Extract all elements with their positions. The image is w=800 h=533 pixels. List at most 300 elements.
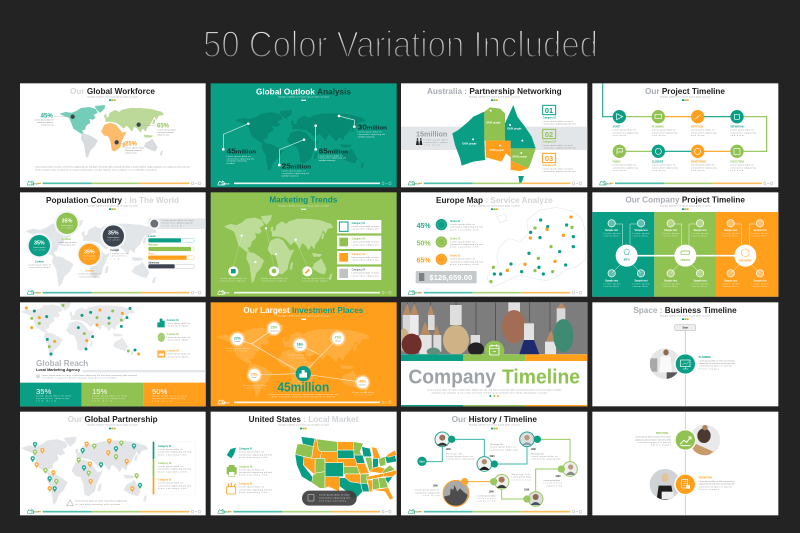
timeline labels row one: Lorem ipsum dolor sit [652, 129, 676, 132]
australia map [452, 105, 536, 183]
stat 25 million: consectetur adipiscing elit [282, 172, 309, 175]
connector lines [237, 328, 363, 382]
footer [27, 509, 200, 514]
sample text labels top: Sample text [605, 229, 618, 232]
bubble dark: sed [110, 258, 120, 260]
sample text labels top: Sample text [664, 279, 677, 282]
bubble green: 35% [62, 219, 73, 225]
percentage bands [20, 383, 206, 406]
timeline notes: 1990 [433, 486, 439, 488]
percentage bands: consectetur adipiscing [36, 397, 69, 400]
location bubbles: France [297, 347, 303, 349]
stat 45% [34, 114, 54, 127]
slide: australia partnership networking: XXXK people [507, 128, 522, 130]
sample text labels top: Sample text [634, 229, 648, 232]
category panel: consectetur adipiscing elit sed [158, 484, 191, 487]
location bubbles: 27m [335, 336, 341, 340]
start pill: Start [682, 327, 688, 330]
stat 30 million: sed diam nonummy [358, 136, 375, 138]
timeline labels row two: Lorem ipsum dolor sit [691, 164, 715, 167]
category 03: Lorem ipsum dolor sit amet [543, 167, 573, 170]
lorem labels: consectetur [723, 235, 738, 238]
category panel: diam nonummy nibh [158, 454, 187, 456]
bubble teal [27, 233, 52, 269]
content 03: Lorem ipsum dolor sit [167, 353, 190, 356]
category 02: diam nonummy nibh [239, 475, 268, 477]
percentage bands: 50% [152, 387, 168, 396]
globe callout [148, 218, 206, 229]
category 02: Lorem ipsum dolor sit [239, 468, 264, 471]
timeline labels row two: FINISH [613, 162, 621, 164]
sample text labels top: Sample text [664, 229, 677, 232]
content 03: consectetur adipis [167, 355, 188, 358]
stat 25 million: Lorem ipsum dolor sit [282, 170, 306, 173]
slide: population country: Sample subtitle text lorem ipsum dolor sit amet [87, 204, 138, 207]
percentage bands: Lorem ipsum dolor sit amet [92, 395, 127, 398]
category 01 [543, 105, 576, 126]
world map [216, 325, 370, 397]
slide title: Marketing Trends [269, 195, 338, 205]
note with warning icon [67, 500, 127, 506]
category 03: Category 03 [543, 164, 557, 167]
world map [235, 110, 366, 171]
stat 45 million: tincidunt [227, 162, 235, 165]
bubble orange: Content [85, 270, 94, 273]
reach note [36, 374, 137, 380]
location bubbles: 45m [359, 380, 366, 384]
category card 04: Lorem ipsum dolor sit amet [352, 272, 379, 275]
sample text labels top: Sample text [693, 279, 707, 282]
series 01: 45% [417, 223, 431, 230]
big heading: Company [408, 366, 496, 388]
slide title: Australia : Partnership Networking [427, 86, 562, 96]
cover description: Lorem ipsum dolor sit amet, consectetur adipiscing elit, sed diam nonummy nibh euismod tincidunt ut laoreet dolore magna [427, 389, 562, 392]
timeline labels row one: DEFINITION [730, 127, 744, 129]
bubble green: sit amet [61, 227, 73, 230]
world map [25, 220, 157, 287]
content 01: consectetur adipis [167, 325, 188, 328]
slide: australia partnership networking: XXXK people [462, 143, 477, 145]
definition node [674, 473, 696, 495]
bottom icons: Lorem ipsum dolor sit [261, 277, 288, 280]
timeline labels row two: EXECUTION [730, 162, 744, 164]
series 03: Series 03 [450, 256, 461, 258]
bubble teal: consectetur adipis [29, 266, 50, 269]
slide title: Our Global Workforce [70, 86, 155, 96]
timeline labels row one [613, 126, 756, 137]
slide: history timeline: Sample subtitle text lorem ipsum dolor sit amet [469, 423, 520, 426]
timeline nodes [613, 110, 744, 158]
category 02: consectetur adipiscing elit sed [543, 147, 576, 150]
category panel: consectetur adipiscing elit sed [158, 468, 191, 471]
stat 65%: Lorem ipsum dolor [157, 128, 176, 131]
stat 65% [157, 124, 176, 137]
slide: australia partnership networking: Sample subtitle text lorem ipsum dolor sit amet [469, 95, 520, 98]
europe outline map [487, 207, 587, 287]
lorem labels: Lorem ipsum [723, 282, 740, 285]
planning text: adipiscing elit sed diam nonummy nibh [699, 362, 735, 365]
timeline notes: Message title [512, 473, 531, 476]
content 02: Content 02 [167, 333, 179, 336]
photo of hanging bulbs [399, 302, 587, 356]
stat 30 million [358, 125, 387, 138]
cover description [427, 389, 562, 395]
total value: $126,659.00 [429, 273, 472, 282]
stat 65%: 65% [157, 124, 170, 130]
footer: Space [222, 181, 230, 185]
definition text: dolore magna [699, 488, 719, 491]
definition text: Lorem ipsum dolor sit amet consectetur [699, 480, 735, 483]
sample text labels top [605, 229, 767, 282]
timeline notes: 1990 [555, 476, 561, 478]
timeline labels row two: MONITORING [691, 162, 706, 164]
series 03 [417, 254, 483, 266]
timeline labels row one: sed diam [652, 135, 666, 137]
bottom icons: consectetur adipis [261, 280, 286, 283]
slide: business timeline top: Sample subtitle text lorem ipsum dolor sit amet [660, 314, 711, 317]
green pins [33, 440, 139, 485]
content 01: Content 01 [167, 319, 179, 322]
main nodes: CREATE [680, 259, 691, 262]
slide: global partnership: Sample subtitle text lorem ipsum dolor sit amet [87, 423, 138, 426]
timeline notes: Lorem ipsum dolor [512, 476, 531, 479]
series 01: diam nonummy nibh [450, 229, 479, 231]
city photo node [443, 478, 469, 506]
bottom icons: Lorem ipsum dolor sit [303, 277, 330, 280]
category 03: consectetur adipiscing elit sed [543, 170, 576, 173]
lorem labels: consectetur [604, 285, 619, 288]
category card 02: Category 02 [352, 238, 366, 241]
bubble teal: Lorem ipsum dolor sit [28, 263, 51, 266]
note with warning icon: Lorem ipsum dolor sit amet consectetur adipiscing [75, 500, 127, 503]
timeline labels row one: START [613, 126, 621, 129]
stat 15 million: Lorem ipsum dolor [424, 139, 448, 142]
main heading: 50 Color Variation Included [203, 24, 598, 65]
category card 02: Lorem ipsum dolor sit amet [352, 241, 379, 244]
footer: Space [222, 510, 230, 514]
category panel [153, 442, 196, 494]
footer [218, 181, 391, 185]
timeline notes: Lorem ipsum dolor sit [446, 455, 473, 458]
sample text labels top: Sample text [753, 229, 767, 232]
initiation text: euismod tincidunt ut laoreet [638, 441, 671, 444]
category 02: Lorem ipsum dolor sit amet [543, 144, 573, 147]
timeline notes: Message title [490, 443, 504, 446]
bubble orange: sit amet [83, 257, 96, 260]
planning text: Lorem ipsum dolor sit amet consectetur [699, 359, 735, 362]
timeline labels row two: Lorem ipsum dolor sit [652, 164, 676, 167]
category 02: consectetur adipiscing elit sed [239, 471, 272, 474]
bubble notes: Lorem ipsum dolor [225, 347, 249, 350]
sample text labels top: Sample text [753, 279, 767, 282]
sample text labels top: Sample text [724, 279, 737, 282]
location bubbles: Russia [335, 340, 341, 342]
lorem labels: consectetur [752, 235, 767, 238]
slide title: Europe Map : Service Analyze [436, 195, 553, 205]
connector lines [627, 253, 745, 258]
stat 45%: sed amet consecte [37, 121, 54, 124]
slide: global outlook analysis [211, 83, 397, 187]
planning text: dolore magna [699, 367, 719, 370]
series 02: diam nonummy nibh [450, 247, 479, 249]
percentage bands: Lorem ipsum dolor sit amet [36, 395, 71, 398]
definition text: euismod tincidunt ut laoreet [699, 485, 732, 488]
percentage bands: consectetur adipiscing [92, 397, 125, 400]
center investment icon [296, 366, 311, 381]
category panel: diam nonummy nibh [158, 471, 187, 473]
timeline labels row two: sed diam [652, 170, 666, 172]
stat 45%: 45% [41, 114, 53, 120]
percentage bands: Lorem ipsum dolor sit amet [152, 395, 187, 398]
footer [408, 509, 581, 514]
timeline notes: consectetur adipiscing [531, 458, 560, 461]
category card 04: consectetur adipiscing [352, 274, 379, 277]
main nodes [616, 245, 756, 267]
initiation text: adipiscing elit sed diam nonummy nibh [635, 438, 672, 441]
dark callout pill: sed diam nonummy [319, 500, 347, 502]
initiation text: dolore magna [651, 444, 672, 447]
dark callout pill: consectetur adipiscing elit [319, 496, 350, 499]
slide: history timeline [401, 412, 587, 515]
slide: united states local market [211, 412, 397, 515]
timeline labels row two: consectetur adipiscing [691, 166, 717, 169]
lorem labels: Lorem ipsum [633, 232, 650, 235]
timeline notes [415, 443, 563, 503]
photo: rafting [690, 425, 720, 455]
timeline notes: consectetur adipiscing [415, 491, 440, 494]
portrait nodes teal [435, 432, 541, 471]
slide: australia partnership networking: XXXK people [486, 122, 501, 124]
stat 45%: adipiscing [41, 125, 54, 127]
category 01: Category 01 [239, 448, 253, 451]
bottom icons [220, 266, 330, 283]
bubble dark: 35% [108, 231, 119, 237]
slide title: Our Largest Investment Places [243, 305, 364, 315]
location bubbles: 25m [251, 372, 258, 376]
slide: australia partnership networking [401, 83, 587, 187]
lorem labels [604, 232, 769, 288]
footer: Space [31, 181, 39, 185]
initiation text: INITIATION [656, 432, 668, 435]
slide: our project timeline [592, 83, 778, 187]
progress bars: Boss [148, 253, 155, 255]
location bubbles: 18m [297, 342, 303, 346]
category card 01 [337, 220, 381, 233]
bubble green: Lorem ipsum dolor [58, 241, 77, 244]
content 01 [157, 319, 190, 328]
category 01: diam nonummy nibh [239, 457, 268, 459]
slide: largest investment places [211, 302, 397, 406]
series 02: 50% [417, 240, 431, 247]
series 03: consectetur adipiscing elit sed [450, 260, 483, 263]
total figure [268, 381, 339, 398]
total figure: 45million [277, 381, 329, 395]
category card 03: Lorem ipsum dolor sit amet [352, 256, 379, 259]
bottom icons: Lorem ipsum dolor sit [220, 277, 247, 280]
stat 25 million [282, 164, 311, 177]
bubble teal: Lorem ipsum [33, 246, 46, 249]
vertical timeline [684, 331, 687, 406]
timeline notes: consectetur adipiscing [446, 458, 475, 461]
timeline labels row one: INITIATION [691, 126, 703, 129]
location bubbles: Canada [234, 341, 240, 343]
footer: Space [31, 291, 39, 295]
stat 25%: adipiscing [125, 153, 137, 155]
content 02 [158, 333, 190, 342]
timeline notes: 1990 [531, 449, 537, 451]
stat 65 million: sed diam nonummy [319, 160, 336, 162]
bubble green: Content [62, 238, 71, 241]
description: minim veniam, quis nostrud exerci tation ullamcorper suscipit lobortis nisl ut aliquip ex ea commodo consequat [35, 169, 157, 172]
map callout lines [223, 116, 354, 165]
location bubbles: Brazil [252, 377, 257, 379]
timeline notes: consectetur [512, 478, 531, 481]
total value [416, 271, 477, 283]
start pill [675, 325, 696, 331]
category 03 [543, 153, 576, 173]
bubble green [54, 211, 80, 247]
series 01 [417, 219, 483, 231]
stat 15 million: consectetur adipis [424, 141, 448, 144]
footer: Space [222, 400, 230, 404]
footer: Space [412, 510, 420, 514]
slide title: Our History / Timeline [452, 414, 537, 424]
stat 15 million: 15million [416, 132, 447, 139]
globe callout: Lorem ipsum dolor sit amet [162, 219, 194, 222]
category card 04 [337, 267, 381, 280]
initiation text: Lorem ipsum dolor sit amet consectetur [635, 436, 671, 439]
stat 25%: Lorem ipsum dolor [125, 146, 145, 149]
lorem labels: Lorem ipsum [752, 232, 769, 235]
footer [218, 290, 391, 295]
stat 30 million: consectetur adipiscing elit [358, 133, 385, 136]
slide: global workforce [20, 83, 206, 187]
definition text: DEFINITION [699, 478, 712, 480]
global reach heading [36, 358, 206, 372]
bubble green: Lorem ipsum [61, 224, 73, 227]
slide: europe map: Sample subtitle text lorem ipsum dolor sit amet [469, 204, 520, 207]
sample text labels top: Sample text [605, 279, 618, 282]
timeline labels row two: consectetur adipiscing [613, 166, 639, 169]
slide: global outlook analysis: Sample subtitle text lorem ipsum dolor sit amet [278, 95, 329, 98]
series 01: Series 01 [450, 221, 461, 223]
service dots [494, 220, 573, 274]
start node [417, 457, 427, 466]
category 02 [543, 129, 576, 150]
total figure: Lorem ipsum dolor sit amet consectetur adipiscing elit sed [268, 393, 339, 396]
slide: europe map [401, 192, 587, 297]
slide title: United States : Local Market [249, 414, 359, 424]
lorem labels: Lorem ipsum [752, 282, 769, 285]
cover description: aliquam erat volutpat ut wisi enim ad minim veniam, quis nostrud exerci tation ullamcorper suscipit [432, 392, 547, 395]
timeline notes: consectetur [543, 482, 562, 485]
timeline path [422, 439, 570, 499]
category 03: Category 03 [239, 483, 253, 486]
bubble orange: Lorem ipsum [83, 255, 96, 258]
sample text labels top: Sample text [724, 229, 737, 232]
timeline notes: Message title [446, 452, 463, 455]
bubble green: consectetur sed [60, 244, 76, 247]
stat 65 million [319, 148, 348, 162]
bubble orange [77, 242, 102, 278]
lorem labels: consectetur [604, 235, 619, 238]
category 02: 02 [545, 130, 553, 139]
series 02: consectetur adipiscing elit sed [450, 243, 483, 246]
stat 65 million: 65million [319, 148, 348, 155]
timeline notes: sed diam [423, 495, 440, 497]
percentage bands: sed diam [152, 400, 172, 402]
category panel: Category 01 [158, 445, 172, 448]
content 02: Lorem ipsum dolor sit [167, 336, 190, 339]
lorem labels: consectetur [692, 285, 707, 288]
footer: Space [222, 291, 230, 295]
stat 25%: sed amet consecte [125, 149, 142, 152]
location dots [34, 308, 135, 354]
timeline labels row one: Lorem ipsum dolor sit [730, 129, 754, 132]
category panel: Lorem ipsum dolor sit [158, 465, 183, 468]
timeline labels row one: consectetur adipiscing [613, 131, 639, 134]
category panel: Category 02 [158, 462, 172, 465]
timeline notes: Lorem ipsum dolor sit [531, 455, 558, 458]
progress bars: Leader [148, 236, 156, 238]
footer: Space [603, 181, 612, 185]
slide: largest investment places: Sample subtitle text lorem ipsum dolor sit amet [278, 314, 329, 317]
timeline notes: Lorem ipsum dolor [543, 479, 560, 482]
timeline labels row two: sed diam [613, 170, 626, 172]
category card 04: Category 04 [352, 269, 366, 272]
series 03: 65% [417, 258, 431, 265]
timeline labels row one: consectetur adipiscing [652, 131, 678, 134]
footer: Space [412, 291, 420, 295]
category panel: consectetur adipiscing elit sed [158, 451, 191, 454]
category 02: Category 02 [543, 141, 557, 144]
world map [224, 215, 333, 283]
main nodes: DELIVERY [739, 259, 752, 262]
color bars [401, 354, 587, 361]
globe callout: consectetur adipiscing elit [162, 222, 193, 225]
lorem labels: Lorem ipsum [604, 232, 621, 235]
reach note: Lorem ipsum dolor sit amet, consectetur adipiscing elit sed diam nonummy nibh euismod [42, 374, 137, 377]
stat 15 million [416, 132, 448, 146]
bubble teal: 35% [34, 241, 45, 247]
category 01: consectetur adipiscing elit sed [239, 453, 272, 456]
category card 01: consectetur adipiscing [352, 228, 379, 231]
timeline notes: Lorem ipsum dolor [477, 494, 496, 497]
globe callout: sed diam [162, 225, 182, 227]
percentage bands: 35% [36, 387, 52, 396]
slide: business timeline bottom [592, 412, 778, 515]
category card 01: Category 01 [352, 222, 366, 225]
timeline labels row two: Lorem ipsum dolor sit [613, 164, 636, 167]
vertical timeline [684, 412, 687, 515]
slide title: Our Project Timeline [645, 86, 725, 96]
stat 25%: 25% [125, 142, 138, 148]
timeline notes: Message title [531, 452, 545, 455]
category 02 [227, 465, 272, 477]
location bubbles: Australia [359, 383, 366, 386]
timeline notes: 1990 [524, 489, 530, 491]
timeline path [603, 83, 767, 151]
planning text [699, 356, 735, 370]
percentage bands: consectetur adipiscing [152, 397, 185, 400]
footer: Space [31, 510, 39, 514]
bubble notes: consectetur [289, 356, 310, 359]
progress bars: Salesman [148, 263, 160, 265]
content 02: consectetur adipis [167, 339, 188, 342]
color columns [592, 212, 778, 297]
stat 30 million: 30million [358, 125, 387, 132]
bubble notes: Lorem ipsum dolor [352, 391, 374, 394]
